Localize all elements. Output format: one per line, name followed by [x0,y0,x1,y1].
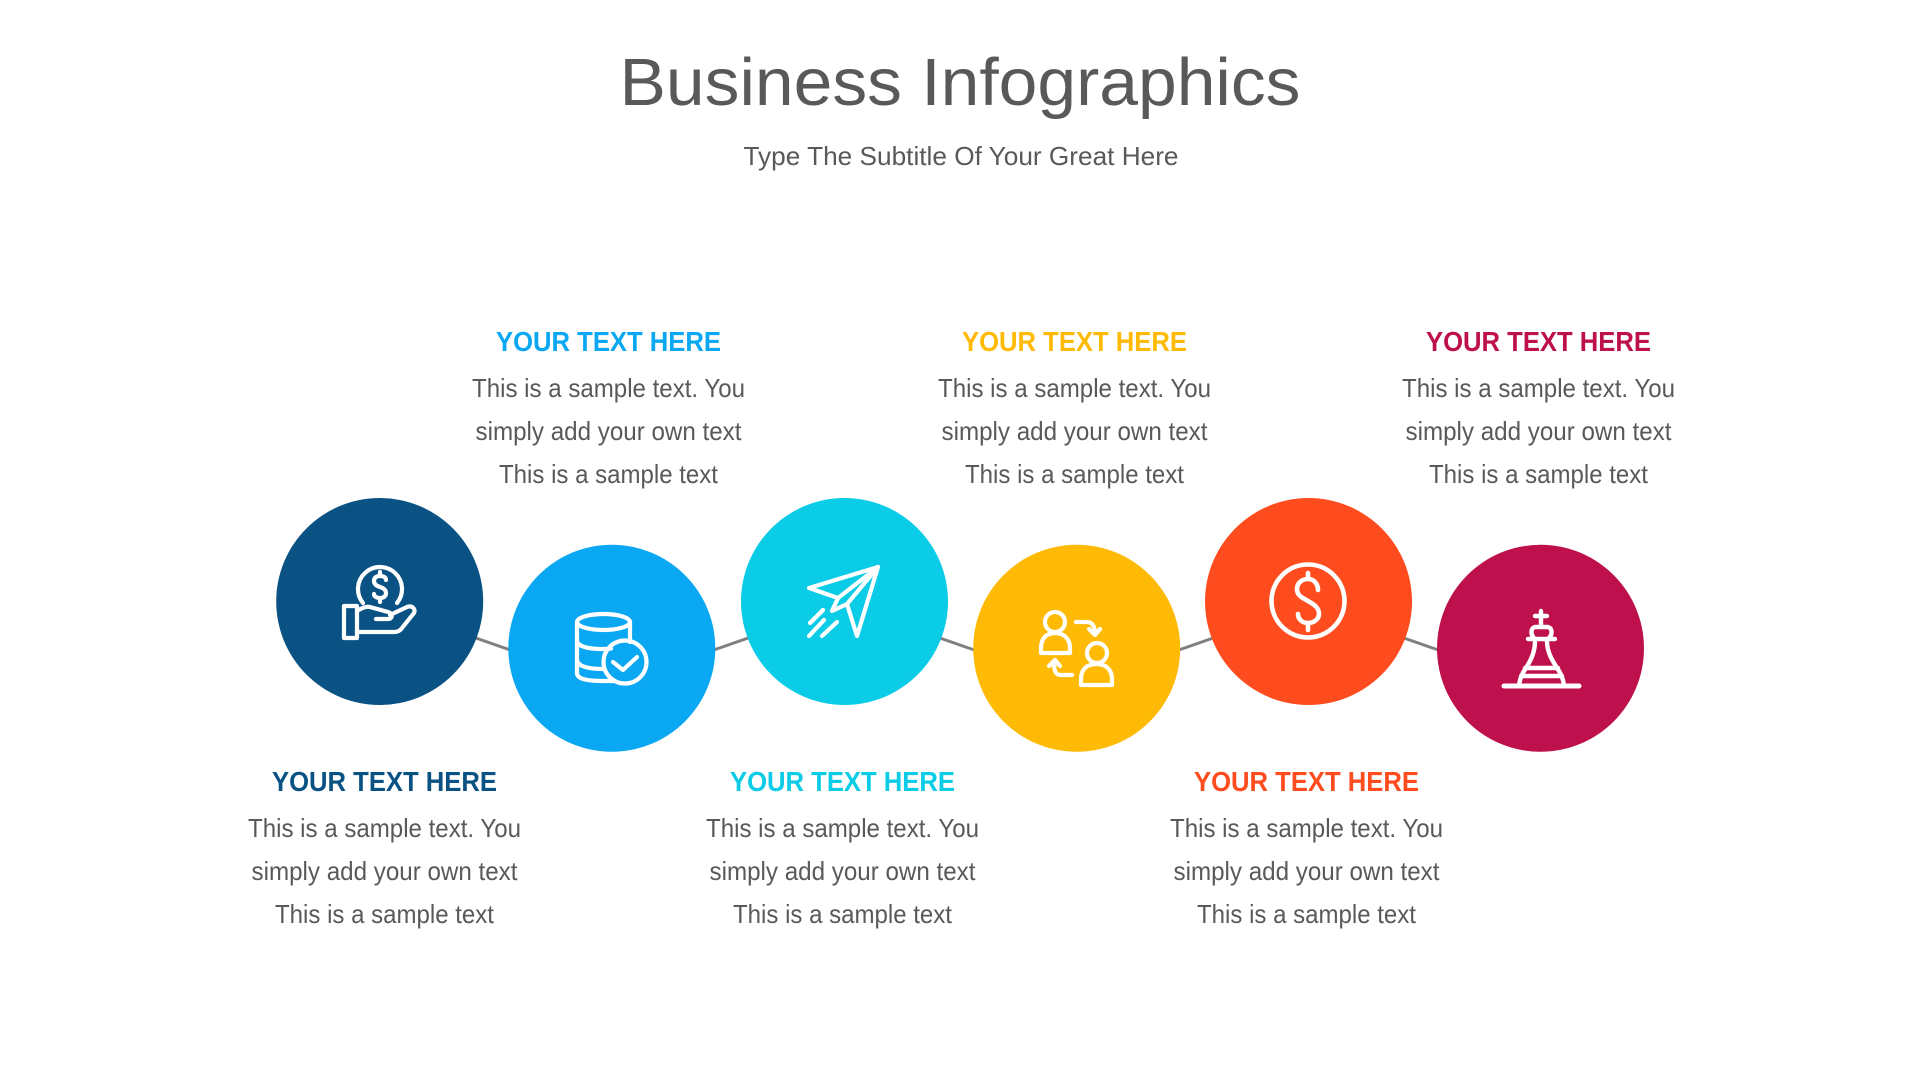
text block: step 4: simply add your own text [942,416,1208,446]
text block: step 1 [248,766,521,929]
icon: database with check mark [577,614,646,684]
text block: step 5: YOUR TEXT HERE [1194,766,1419,797]
text block: step 6: YOUR TEXT HERE [1426,326,1651,357]
text block: step 4 [938,326,1211,489]
icon: hand holding coin [344,567,415,638]
text block: step 4: This is a sample text. You [938,373,1211,403]
text block: step 5: This is a sample text. You [1170,813,1443,843]
text block: step 2: This is a sample text [499,459,719,489]
icon: dollar coin [1272,564,1344,638]
text block: step 6: This is a sample text [1429,459,1649,489]
step 1: dark blue circle with hand and coin icon [276,498,483,705]
step 3: cyan circle with paper plane icon [741,498,948,705]
text block: step 6: This is a sample text. You [1402,373,1675,403]
text block: step 2: This is a sample text. You [472,373,745,403]
text block: step 5: simply add your own text [1174,856,1440,886]
text block: step 2: YOUR TEXT HERE [496,326,721,357]
text block: step 5: This is a sample text [1197,899,1417,929]
text block: step 6 [1402,326,1675,489]
text block: step 3: simply add your own text [710,856,976,886]
title: Business Infographics [620,45,1300,120]
text block: step 3: YOUR TEXT HERE [730,766,955,797]
text block: step 1: YOUR TEXT HERE [272,766,497,797]
step 5: orange circle with dollar icon [1205,498,1412,705]
text block: step 3: This is a sample text. You [706,813,979,843]
text block: step 5 [1170,766,1443,929]
text block: step 1: simply add your own text [252,856,518,886]
text block: step 2 [472,326,745,489]
text block: step 3: This is a sample text [733,899,953,929]
icon: two people with swap arrows [1041,612,1112,685]
subtitle: Type The Subtitle Of Your Great Here [744,141,1178,171]
text block: step 1: This is a sample text. You [248,813,521,843]
text block: step 4: This is a sample text [965,459,1185,489]
text block: step 4: YOUR TEXT HERE [962,326,1187,357]
connector lines between circles [470,636,1444,652]
text block: step 1: This is a sample text [275,899,495,929]
text block: step 6: simply add your own text [1406,416,1672,446]
step 6: crimson circle with chess king icon [1437,545,1644,752]
step 4: amber circle with people exchange icon [973,545,1180,752]
text block: step 2: simply add your own text [476,416,742,446]
icon: paper plane [809,567,878,636]
icon: chess king [1504,611,1579,686]
step 2: light blue circle with database icon [508,545,715,752]
text block: step 3 [706,766,979,929]
